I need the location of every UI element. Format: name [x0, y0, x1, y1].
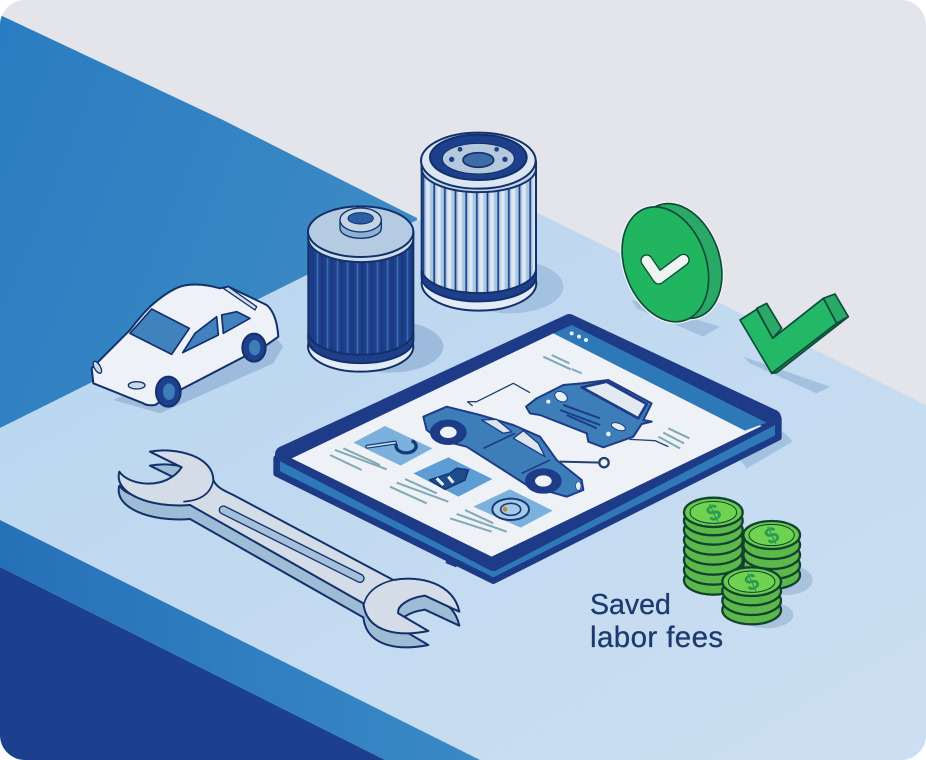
- tool tile: gauge: [473, 489, 553, 528]
- white car: [91, 285, 283, 413]
- tablet: [277, 322, 793, 581]
- caption: saved labor fees: Saved: [590, 589, 671, 621]
- tool tile: bottle: [413, 457, 492, 497]
- tablet screen: [292, 333, 762, 557]
- side-view car on screen: [423, 407, 583, 497]
- caption: saved labor fees: labor fees: [590, 621, 724, 654]
- right oil filter: [421, 133, 563, 313]
- coin stack: front: $: [740, 567, 763, 596]
- coin stack: tall left: $: [702, 498, 725, 527]
- table surface: [0, 212, 926, 760]
- arrow on screen: [467, 383, 668, 447]
- table front edge: [0, 520, 480, 760]
- money coin stacks: [684, 498, 813, 628]
- green check coin: [620, 202, 724, 336]
- front-view car on screen: [526, 380, 652, 447]
- tool tile: wrench: [353, 426, 432, 466]
- left blue wall: [0, 15, 417, 428]
- coin stack: back right: $: [760, 521, 783, 550]
- tablet header bar: [553, 325, 767, 431]
- tablet face: [283, 322, 773, 563]
- wrench on screen: [560, 462, 602, 463]
- tablet body side: [277, 418, 778, 581]
- left oil filter: [308, 206, 443, 373]
- table lower dark panel: [0, 567, 385, 760]
- wrench: [119, 450, 459, 647]
- green 3D check mark: [740, 294, 848, 393]
